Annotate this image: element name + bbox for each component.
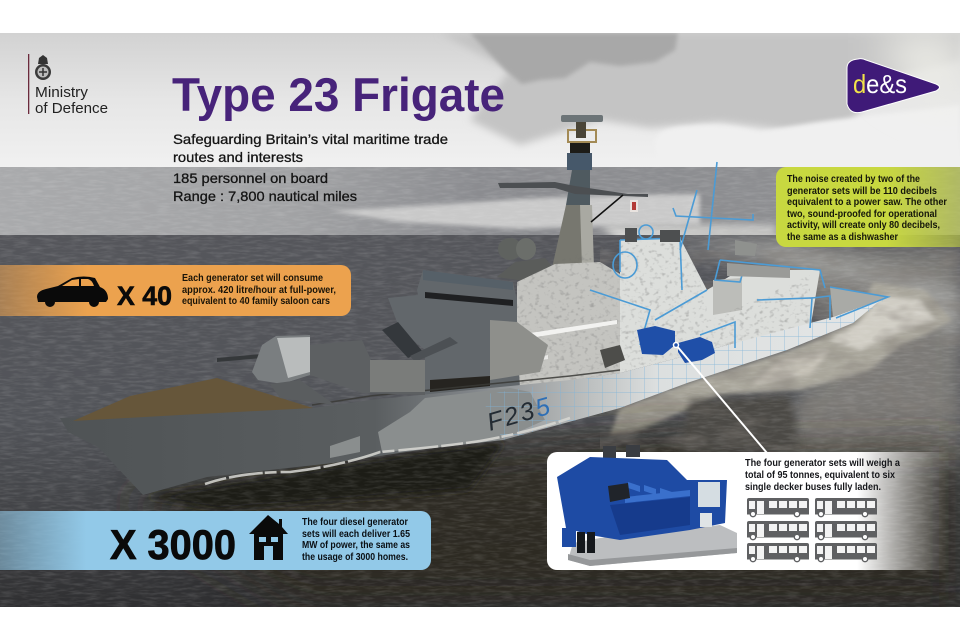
multiplier: X 40: X 40 <box>117 281 172 311</box>
background: distant sea <box>0 167 960 235</box>
icon: car <box>37 276 108 307</box>
hull <box>60 297 888 495</box>
orange panel text: approx. 420 litre/hour at full-power, <box>182 284 336 296</box>
panel: generator weight fact <box>547 445 950 570</box>
panel: blue homes fact <box>0 511 431 570</box>
pointer line <box>674 342 767 453</box>
background: near sea <box>0 167 960 607</box>
panel: green noise fact: the same as a dishwasher <box>787 231 898 243</box>
white panel text: total of 95 tonnes, equivalent to six <box>745 469 895 481</box>
forward superstructure <box>382 270 548 397</box>
foredeck <box>73 378 313 421</box>
panel: orange car fact <box>0 265 351 316</box>
subtitle and key facts: 185 personnel on board <box>173 170 328 186</box>
aft wireframe section <box>590 162 888 348</box>
panel: green noise fact <box>776 167 960 247</box>
white panel text <box>745 457 900 493</box>
logo: Ministry of Defence: Ministry <box>35 84 89 101</box>
subtitle and key facts: Range : 7,800 nautical miles <box>173 188 357 204</box>
hull camouflage patches <box>330 388 545 458</box>
blue panel text: MW of power, the same as <box>302 539 410 551</box>
logo: de&s: de&s <box>853 69 907 99</box>
icons: six buses <box>747 498 877 562</box>
blue panel text <box>302 516 410 563</box>
icon: crest <box>35 55 51 80</box>
subtitle and key facts: Safeguarding Britain’s vital maritime trade <box>173 131 448 147</box>
white panel text: The four generator sets will weigh a <box>745 457 900 469</box>
logo: de&s <box>847 59 940 113</box>
panel: green noise fact: The noise created by two of the <box>787 173 920 185</box>
orange panel text <box>182 272 336 307</box>
bow wave <box>205 418 570 484</box>
orange panel text: Each generator set will consume <box>182 272 323 284</box>
generator sets on ship <box>637 326 715 363</box>
illustration: diesel generator <box>557 445 737 566</box>
multiplier: X 3000: X 3000 <box>110 521 236 568</box>
stern wake <box>610 282 952 435</box>
hull marking F235: F235 <box>484 392 553 437</box>
logo: Ministry of Defence: of Defence <box>35 100 108 117</box>
orange panel text: equivalent to 40 family saloon cars <box>182 295 330 307</box>
blue panel text: the usage of 3000 homes. <box>302 551 408 563</box>
mast tower <box>497 115 648 282</box>
subtitle and key facts: routes and interests <box>173 149 303 165</box>
background: sky <box>0 33 960 168</box>
midships superstructure <box>505 238 820 390</box>
logo: Ministry of Defence <box>28 54 108 117</box>
white panel text: single decker buses fully laden. <box>745 481 881 493</box>
hull gridlines <box>480 297 888 440</box>
subtitle and key facts <box>173 131 448 204</box>
panel: green noise fact: generator sets will be 110 decibels <box>787 185 937 197</box>
panel: green noise fact: two, sound-proofed for operational <box>787 208 937 220</box>
blue panel text: The four diesel generator <box>302 516 408 528</box>
frigate <box>60 115 888 495</box>
forward gun <box>217 335 425 405</box>
icon: house <box>249 515 288 560</box>
deck railing <box>312 370 620 405</box>
blue panel text: sets will each deliver 1.65 <box>302 528 410 540</box>
title: Type 23 Frigate <box>172 68 505 121</box>
